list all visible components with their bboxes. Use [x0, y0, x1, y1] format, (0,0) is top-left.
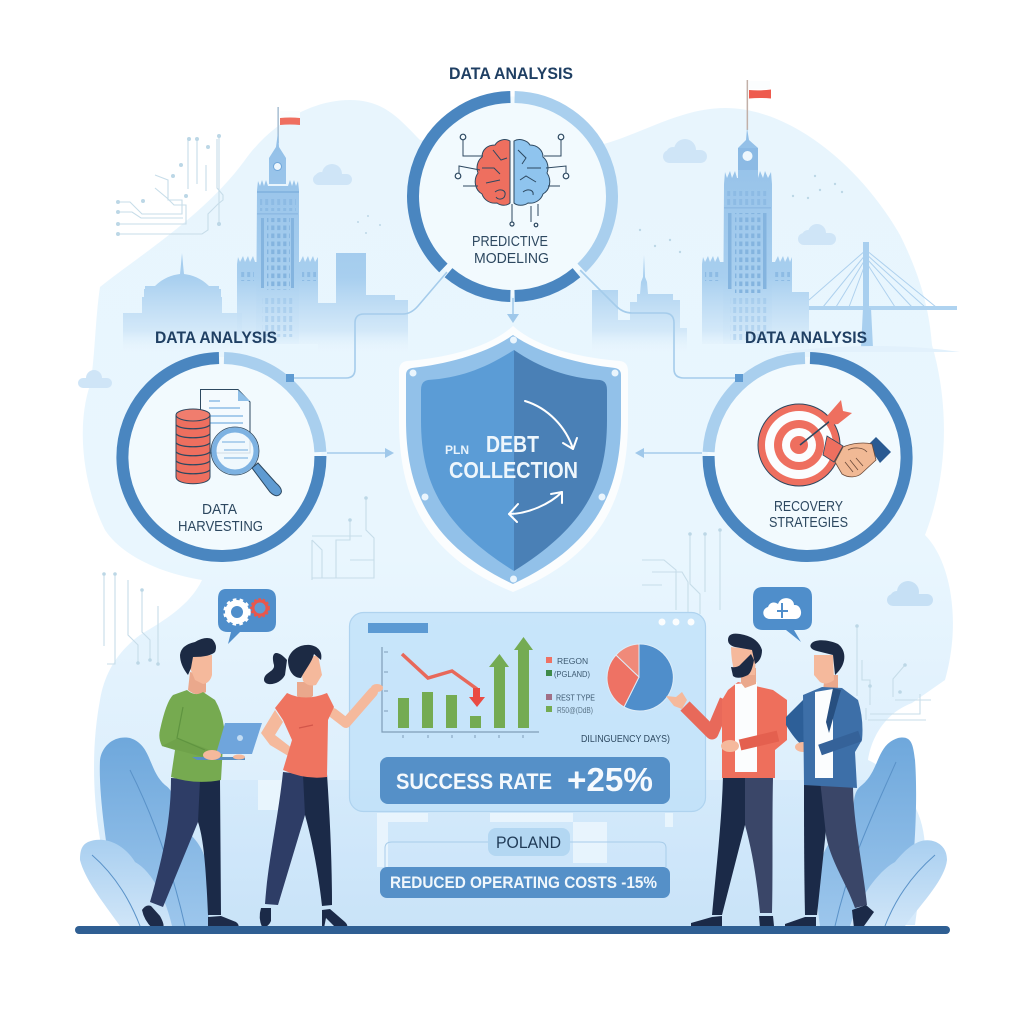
swietokrzyski bridge	[780, 242, 960, 352]
dome building	[123, 253, 242, 352]
circuit nodes	[102, 134, 907, 694]
connectors between circles and shield	[291, 270, 738, 453]
dashboard panel	[350, 612, 706, 812]
icon: red gear	[251, 599, 269, 617]
heading: left data analysis: DATA ANALYSIS	[155, 328, 277, 347]
panel: predictive modeling circle	[412, 96, 612, 296]
label: recovery strategies: RECOVERY	[774, 499, 843, 515]
connector arrowheads	[385, 314, 644, 458]
chart legend	[546, 656, 595, 715]
reduced costs banner: REDUCED OPERATING COSTS -15%	[390, 873, 657, 892]
label: data harvesting: HARVESTING	[178, 519, 263, 535]
shield rivets	[410, 336, 618, 582]
speech bubble: gears	[218, 589, 276, 644]
plant: right	[817, 737, 947, 926]
person: man with beard	[666, 634, 787, 929]
skyline: right	[592, 80, 960, 352]
clouds	[78, 139, 933, 606]
plant: left	[80, 737, 210, 926]
shield cycle arrows	[509, 401, 577, 522]
person: man in blue blazer	[785, 640, 874, 928]
shield: debt collection	[399, 326, 628, 592]
icon: target	[758, 404, 840, 486]
palace of culture left	[237, 132, 318, 344]
label: recovery strategies: STRATEGIES	[769, 515, 848, 531]
pie chart	[607, 644, 673, 711]
icon: dart arrow	[800, 400, 852, 445]
shield label: COLLECTION	[449, 457, 578, 483]
lower background haze	[170, 780, 870, 926]
icon: brain	[455, 134, 569, 227]
right ring segments	[709, 358, 907, 556]
city blocks left	[318, 253, 408, 352]
ring joint right	[735, 374, 743, 382]
palace windows left	[240, 162, 316, 337]
dashboard title bar	[368, 623, 428, 633]
shield label: PLN	[445, 443, 469, 457]
ground line	[75, 926, 950, 934]
icon: white cloud	[763, 598, 801, 619]
bar chart	[382, 637, 539, 738]
chart legend: R50@(DdB)	[557, 705, 593, 715]
reduced costs banner	[380, 867, 670, 898]
label: predictive modeling: MODELING	[474, 251, 549, 267]
shield label: DEBT	[486, 431, 539, 457]
panel: data harvesting circle	[122, 357, 322, 557]
poland pill	[488, 828, 570, 856]
chart legend: REST TYPE	[556, 692, 595, 702]
poland pill: POLAND	[496, 833, 561, 852]
icon: white gear	[224, 600, 250, 624]
ghost buildings behind dashboard	[258, 780, 673, 867]
icon: magnifier	[211, 427, 281, 496]
left ring segments	[122, 358, 320, 556]
palace windows right	[705, 148, 790, 340]
flag: Poland left	[277, 107, 300, 143]
person: woman in coral	[260, 645, 383, 928]
circuit traces	[104, 136, 931, 720]
chart legend: (PGLAND)	[554, 669, 590, 679]
speech bubble: cloud	[753, 587, 812, 642]
chart legend: REGON	[557, 656, 588, 666]
shield label	[445, 431, 578, 483]
background blob	[83, 100, 953, 925]
heading: right data analysis: DATA ANALYSIS	[745, 328, 867, 347]
success rate banner: +25%	[567, 761, 653, 798]
panel: recovery strategies circle	[708, 357, 908, 557]
label: data harvesting: DATA	[202, 502, 237, 518]
heading: top data analysis: DATA ANALYSIS	[449, 64, 573, 83]
window dots	[658, 618, 694, 626]
flag: Poland right	[747, 80, 771, 130]
palace of culture right	[702, 128, 792, 344]
axis caption: DILINGUENCY DAYS)	[581, 734, 670, 745]
ring joint left	[286, 374, 294, 382]
icon: handshake	[823, 436, 891, 477]
top ring segments	[413, 97, 612, 296]
skyline: left	[123, 107, 408, 352]
poland outline bracket	[385, 842, 666, 867]
icon: database cylinder	[176, 409, 210, 484]
success rate banner: SUCCESS RATE	[396, 769, 552, 794]
city blocks right	[592, 255, 809, 352]
success rate banner	[380, 757, 670, 804]
icon: plane mark	[777, 603, 788, 618]
label: predictive modeling: PREDICTIVE	[472, 234, 548, 250]
icon: document	[200, 390, 250, 453]
person: man in green	[142, 638, 262, 928]
